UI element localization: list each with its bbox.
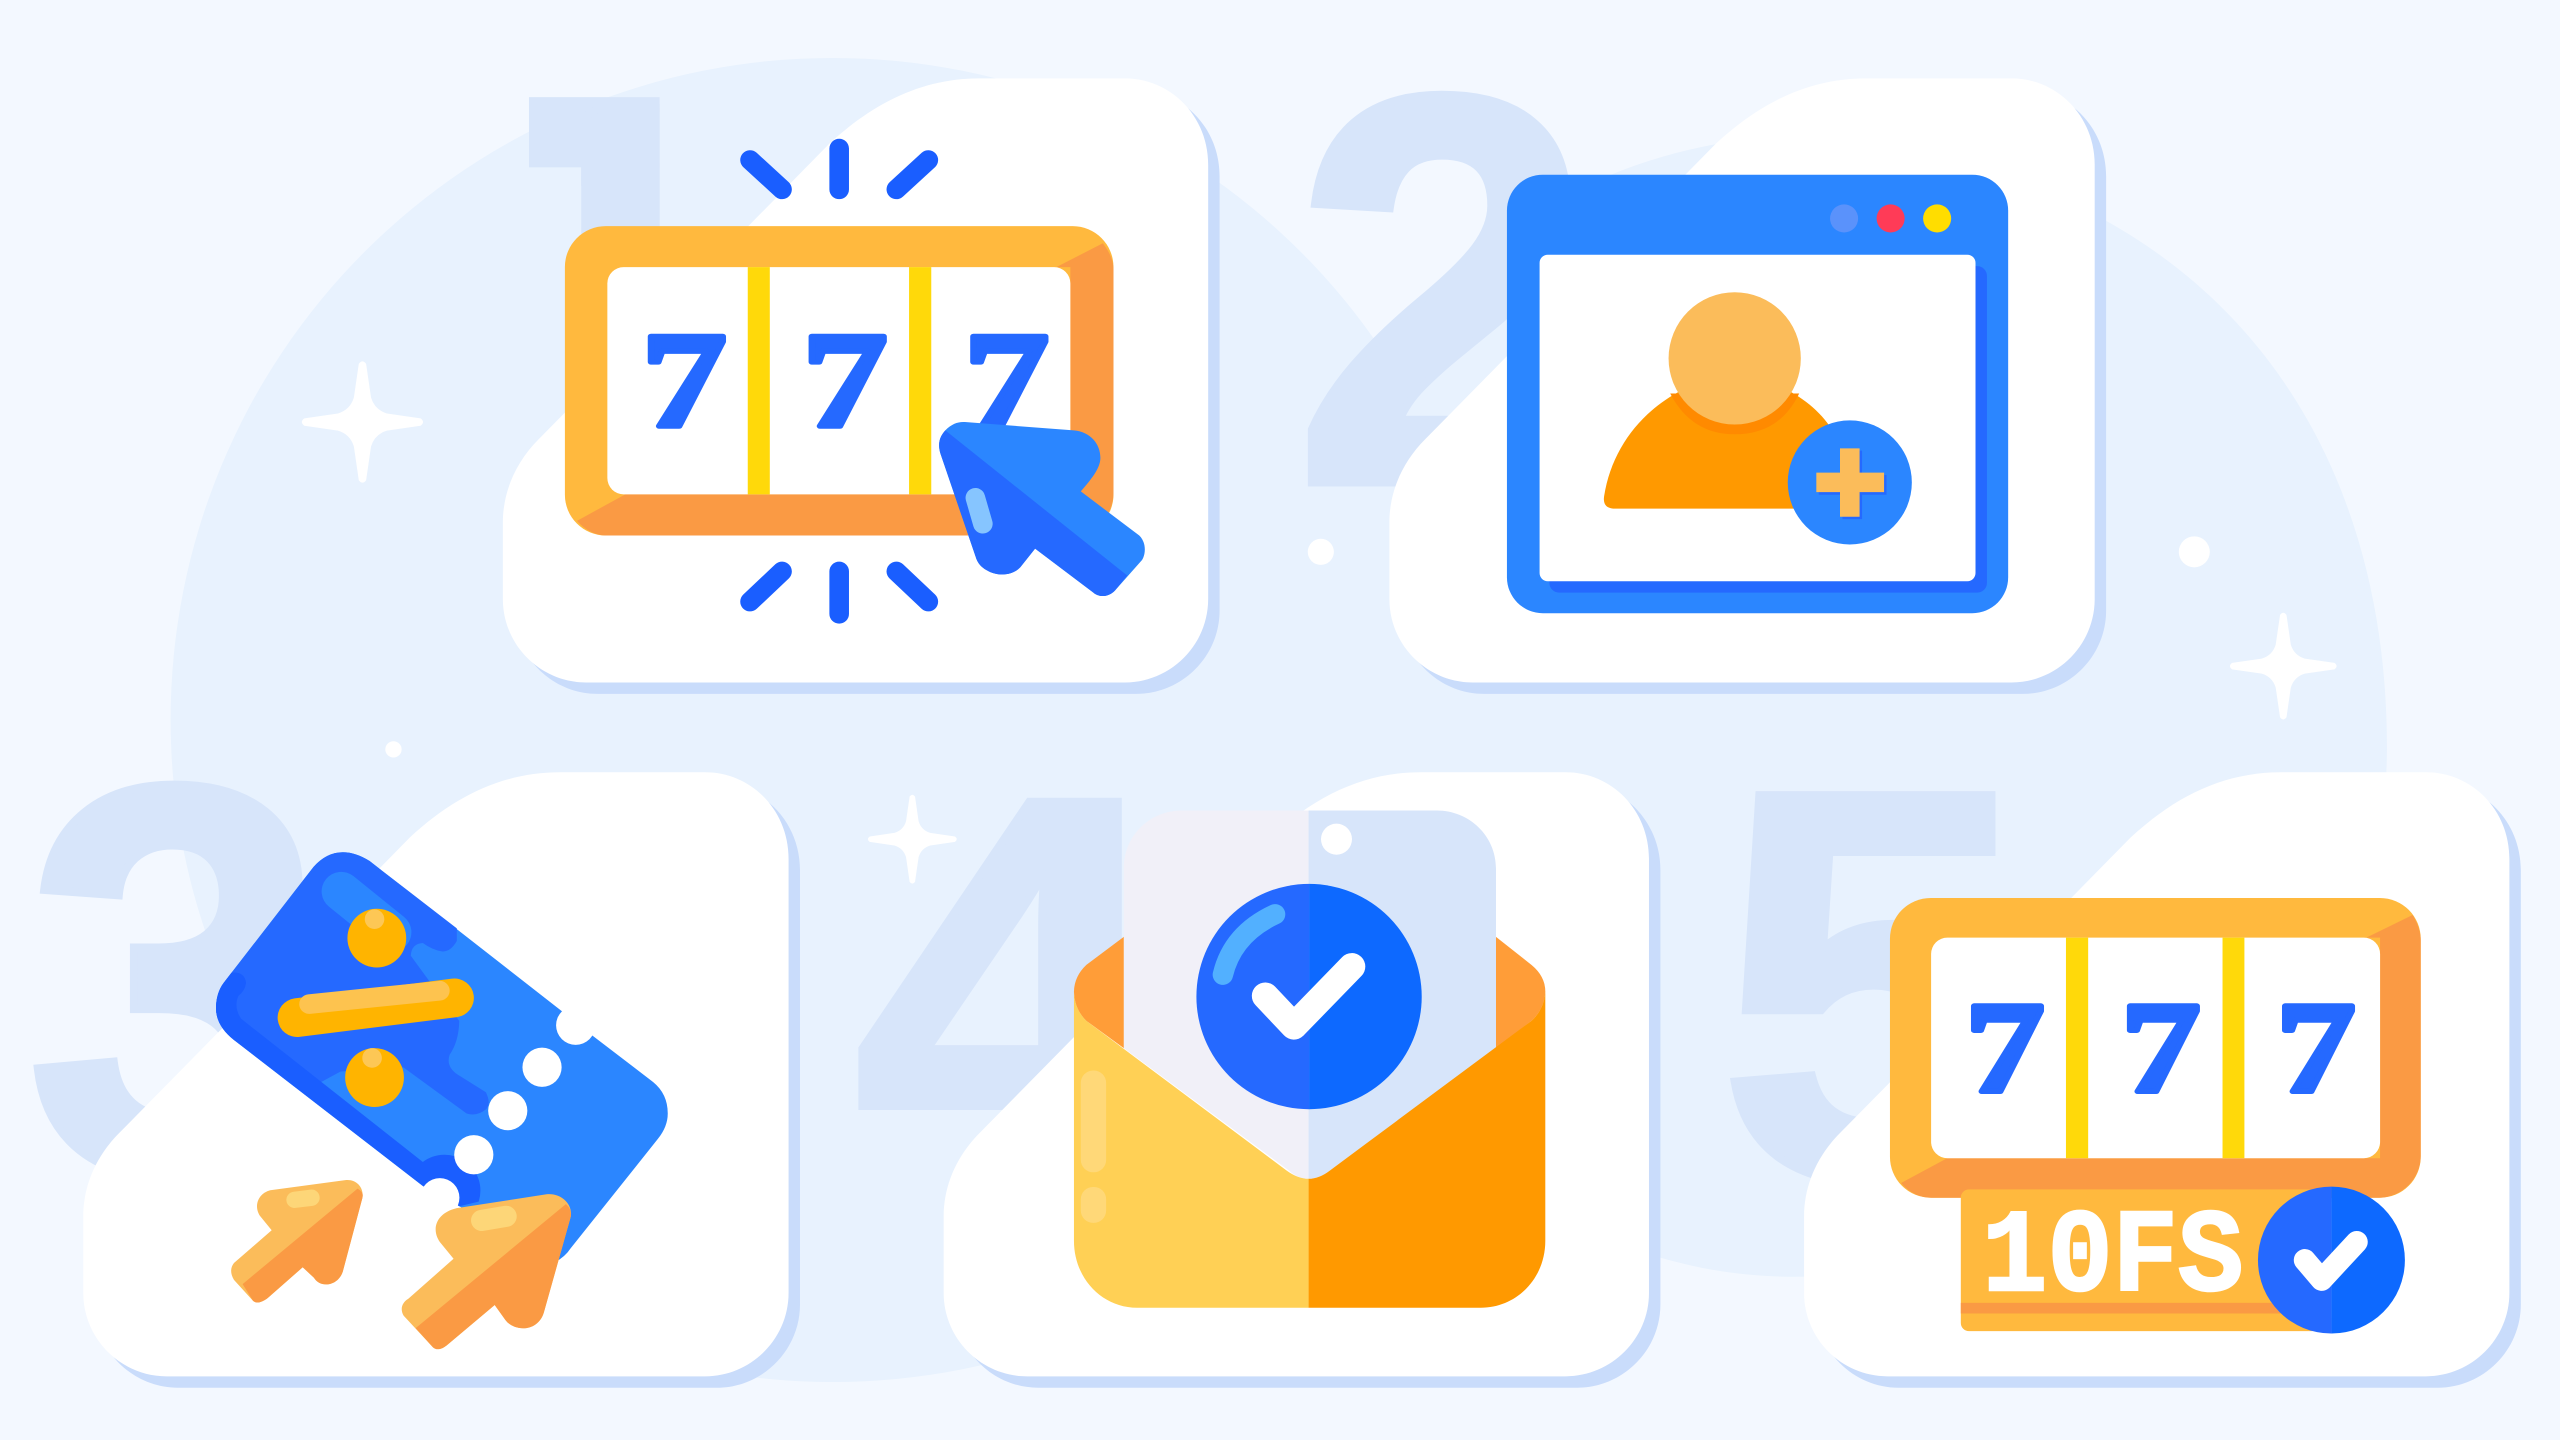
icon: slot machine: [1890, 898, 2421, 1198]
step number 1: 1: [465, 0, 774, 608]
icon: user avatar: [1604, 292, 1837, 509]
panel: step 2, sign up window: [1293, 0, 2106, 694]
card shadow: [955, 784, 1660, 1388]
icon: slot machine: 7: [2276, 975, 2356, 1120]
icon: add user badge: [1788, 420, 1912, 544]
step number 3: 3: [25, 670, 328, 1290]
icon: slot machine: 7: [964, 304, 1049, 456]
dot: right: [2179, 536, 2210, 567]
icon: spark lines: [750, 149, 928, 614]
white card: [83, 772, 789, 1376]
icon: open envelope: [1074, 810, 1545, 1308]
background blob: right shape: [1143, 139, 2387, 1277]
panel: step 4, confirmation email: [854, 682, 1660, 1388]
panel: step 1, slot machine click: [503, 78, 1220, 694]
icon: large arrow: [402, 1194, 571, 1349]
white card: [503, 78, 1208, 682]
icon: slot machine: 7: [2121, 975, 2201, 1120]
card shadow: [1816, 784, 2521, 1388]
card shadow: [514, 90, 1220, 694]
white card: [1804, 772, 2509, 1376]
sparkle: right: [2230, 613, 2337, 719]
card shadow: [1401, 90, 2106, 694]
icon: small arrow: [231, 1180, 363, 1302]
dot: centre: [1308, 539, 1334, 565]
white card: [944, 772, 1649, 1376]
icon: browser window: [1507, 175, 2008, 613]
icon: slot machine: 7: [802, 304, 888, 456]
card shadow: [95, 784, 800, 1388]
dot: lower left: [385, 741, 402, 758]
sparkle: centre: [868, 795, 957, 884]
icon: slot machine: [565, 226, 1113, 536]
icon: slot machine: 7: [1965, 975, 2045, 1120]
background blob: left circle: [171, 58, 1495, 1382]
step number 1: [529, 97, 660, 234]
white card: [1389, 78, 2095, 682]
icon: verified check badge: [1196, 884, 1422, 1109]
icon: cursor arrow: [939, 422, 1145, 596]
icon: check badge: [2258, 1187, 2405, 1334]
banner: 10FS: 10FS: [1982, 1193, 2243, 1326]
sparkle: left: [302, 361, 423, 483]
panel: step 5, free spins credited: [1718, 676, 2521, 1388]
icon: percent coupon: [216, 852, 668, 1262]
step number 5: 5: [1718, 676, 2029, 1296]
icon: slot machine: 7: [641, 304, 727, 456]
panel: step 3, bonus coupon: [25, 670, 800, 1388]
step number 4: 4: [854, 682, 1177, 1302]
